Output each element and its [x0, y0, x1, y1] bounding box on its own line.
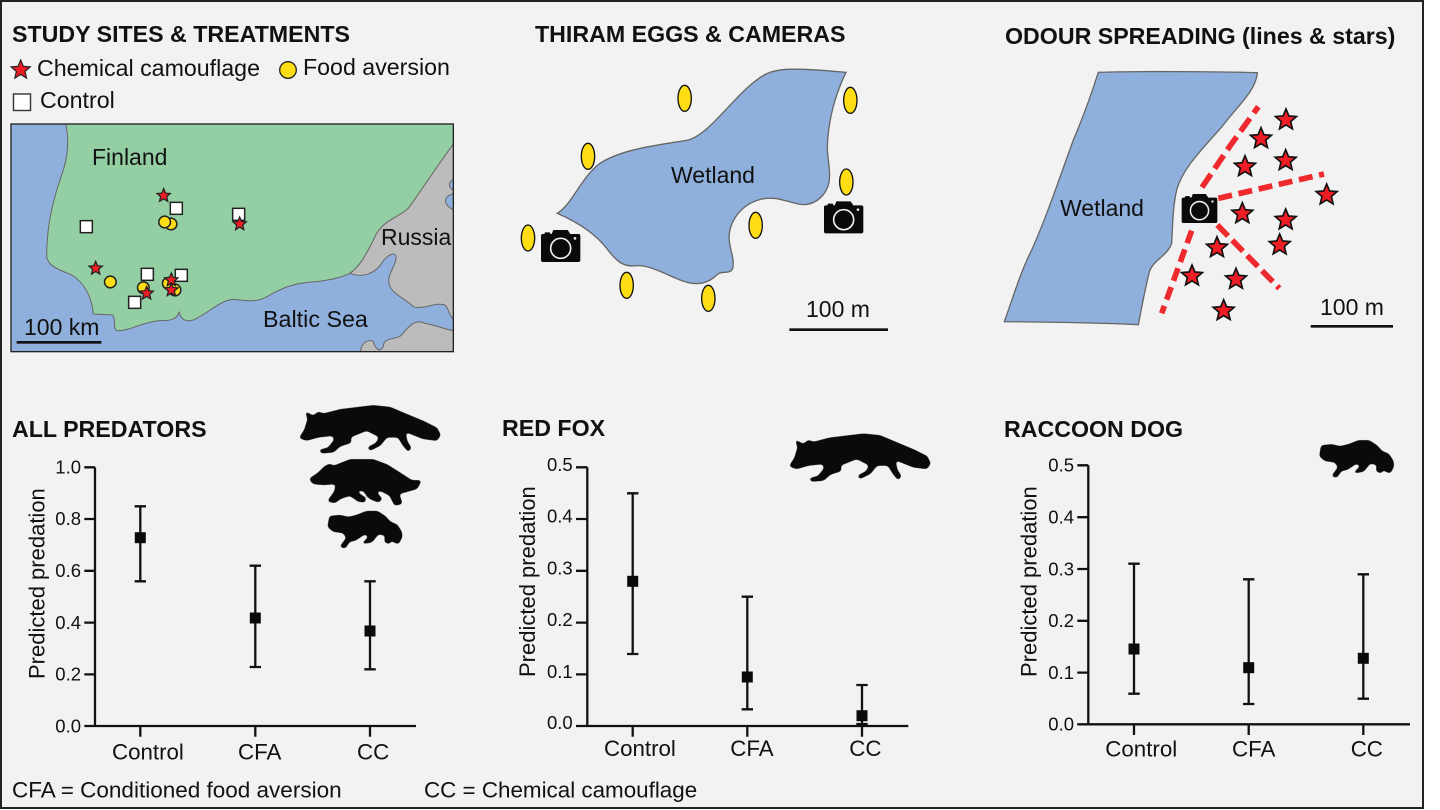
chart: all predators: 0.2 [55, 664, 81, 685]
chart: all predators: 0.6 [55, 560, 81, 581]
footnote: CFA definition: CFA = Conditioned food aversion [12, 778, 342, 802]
map markers: food aversion sites [104, 216, 181, 296]
chart: red fox: 0.3 [547, 557, 573, 578]
chart: raccoon dog: 0.3 [1048, 558, 1074, 579]
icon: camera left [541, 230, 580, 262]
map: southern Finland study sites: Finland [92, 144, 167, 170]
chart: all predators: CFA [238, 740, 281, 764]
chart: red fox: 0.1 [547, 661, 573, 682]
chart: raccoon dog: 0.5 [1048, 455, 1074, 476]
legend: treatments: Food aversion [303, 54, 450, 80]
diagram: odour lines and stars: 100 m [1320, 294, 1384, 320]
legend: treatments: Control [40, 87, 115, 113]
chart: red fox: 0.4 [547, 506, 573, 527]
legend: treatments: Chemical camouflage [37, 55, 260, 81]
icon: raccoon dog silhouette [1320, 441, 1393, 477]
chart: red fox [515, 454, 908, 761]
icon: red fox silhouette [790, 434, 930, 481]
diagram: odour lines and stars [1004, 72, 1393, 328]
chart: red fox: Predicted predation [515, 486, 540, 677]
heading: all predators: ALL PREDATORS [12, 416, 207, 442]
diagram: wetland with eggs and cameras: Wetland [671, 162, 755, 188]
chart: red fox: Control [604, 736, 676, 761]
icon: second canid silhouette [310, 460, 421, 505]
heading: thiram eggs: THIRAM EGGS & CAMERAS [535, 21, 845, 47]
chart: raccoon dog [1017, 455, 1410, 762]
odour stars [1182, 109, 1337, 320]
chart: all predators: 0.0 [55, 715, 81, 736]
chart: raccoon dog: 0.1 [1048, 662, 1074, 683]
chart: red fox: CC [849, 736, 882, 761]
chart: raccoon dog: CC [1351, 737, 1383, 762]
chart: all predators: 0.8 [55, 508, 81, 529]
chart: red fox: CFA [730, 736, 774, 761]
chart: red fox: 0.2 [547, 609, 573, 630]
icon: camera [1182, 194, 1217, 223]
chart: all predators: Predicted predation [24, 488, 50, 679]
chart: all predators: Control [112, 740, 184, 764]
heading: red fox: RED FOX [502, 415, 606, 441]
heading: study sites: STUDY SITES & TREATMENTS [12, 21, 350, 47]
diagram: odour lines and stars: Wetland [1060, 195, 1144, 221]
chart: raccoon dog: 0.0 [1048, 714, 1074, 735]
map markers: chemical camouflage sites [89, 189, 246, 299]
heading: odour spreading: ODOUR SPREADING (lines & stars) [1005, 23, 1395, 49]
map: southern Finland study sites: Baltic Sea [263, 306, 368, 332]
map: southern Finland study sites [11, 122, 455, 353]
legend: treatments [11, 54, 450, 113]
chart: raccoon dog: Control [1105, 737, 1177, 762]
chart: all predators [24, 456, 416, 764]
icon: fox silhouette large [300, 406, 440, 453]
footnote: CC definition: CC = Chemical camouflage [424, 778, 697, 802]
map: southern Finland study sites: 100 km [24, 314, 99, 340]
heading: raccoon dog: RACCOON DOG [1004, 416, 1183, 442]
chart: red fox: 0.5 [547, 454, 573, 475]
chart: all predators: 1.0 [55, 456, 81, 478]
odour lines [1162, 107, 1324, 313]
chart: raccoon dog: Predicted predation [1017, 486, 1042, 677]
chart: all predators: 0.4 [55, 612, 81, 633]
eggs [521, 85, 857, 311]
chart: red fox: 0.0 [547, 712, 573, 733]
diagram: wetland with eggs and cameras: 100 m [806, 296, 870, 322]
icon: raccoon dog silhouette small [328, 512, 402, 548]
chart: all predators: CC [357, 740, 389, 764]
icon: camera right [824, 201, 863, 233]
map markers: control sites [80, 202, 245, 308]
map: southern Finland study sites: Russia [381, 224, 452, 250]
diagram: wetland with eggs and cameras [521, 69, 888, 331]
chart: raccoon dog: 0.2 [1048, 610, 1074, 631]
chart: raccoon dog: 0.4 [1048, 506, 1074, 528]
chart: raccoon dog: CFA [1232, 737, 1275, 762]
